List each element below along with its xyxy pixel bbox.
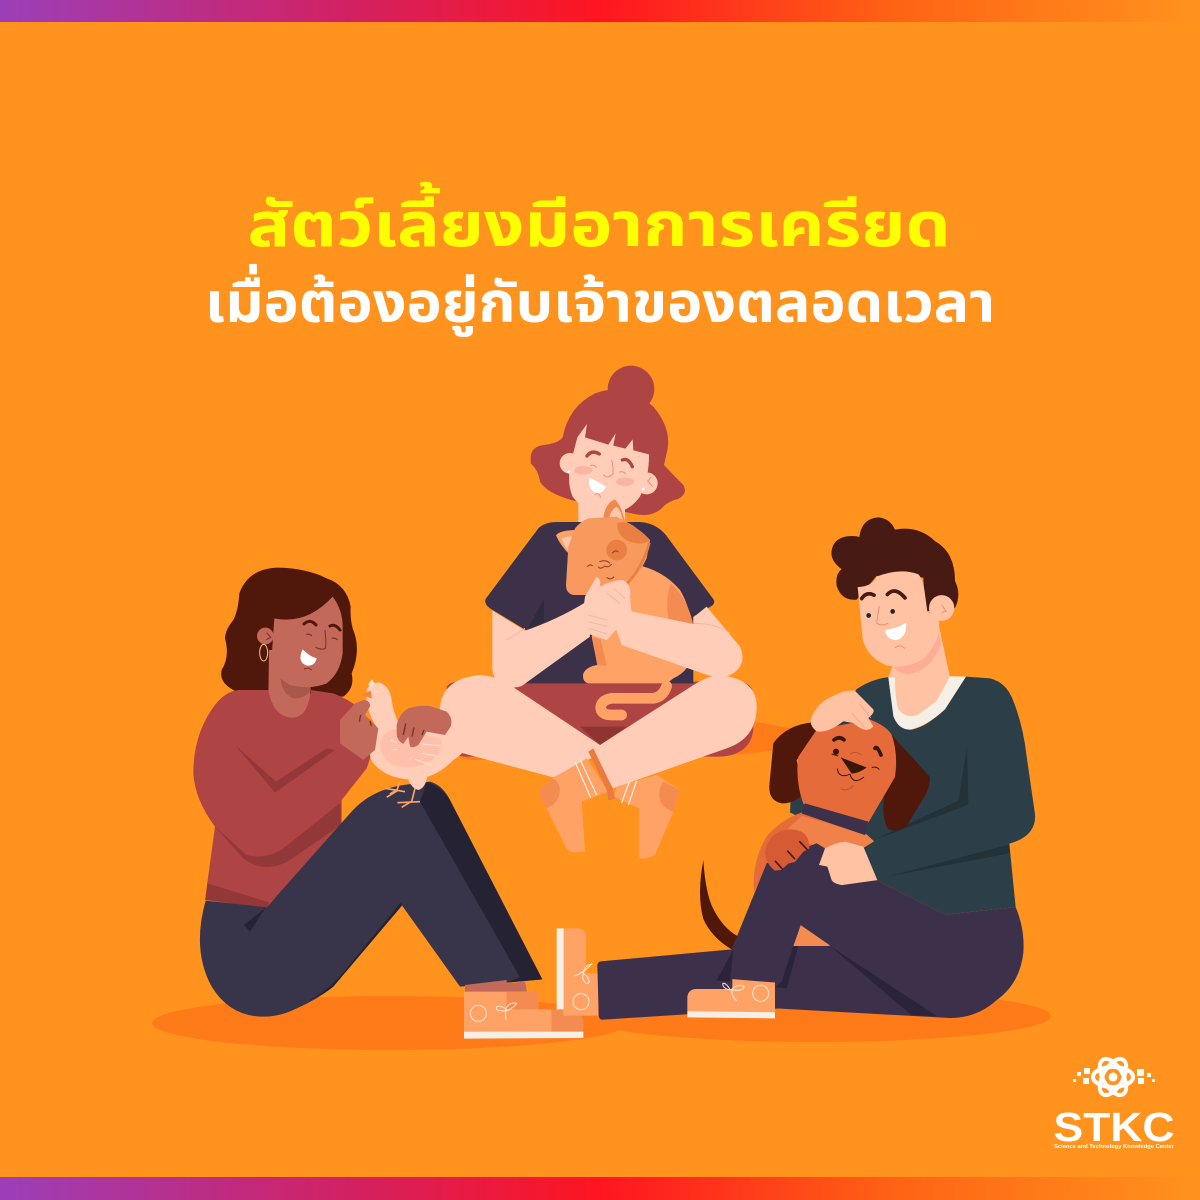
hair <box>831 517 958 611</box>
knuckle marks <box>852 704 871 728</box>
chicken <box>340 679 468 807</box>
pointing hand <box>340 700 378 760</box>
woman with chicken <box>193 568 598 1039</box>
hair <box>531 390 685 515</box>
STKC logo <box>1054 1055 1175 1150</box>
hand on knee <box>819 842 877 885</box>
neck <box>888 623 960 720</box>
feet <box>539 748 680 859</box>
paw claws <box>775 841 807 869</box>
neck <box>268 650 310 718</box>
neck shadow <box>281 678 311 698</box>
dog ears <box>769 722 930 831</box>
neck shadow <box>893 633 941 674</box>
shirt fold <box>527 598 544 629</box>
logo side squares <box>1073 1068 1155 1084</box>
shirt <box>485 522 714 683</box>
face details <box>567 452 653 498</box>
cat tail <box>601 686 667 715</box>
chicken wing <box>380 728 441 767</box>
logo wordmark: STKC <box>1054 1104 1174 1150</box>
logo tagline: Science and Technology Knowledge Center <box>1054 1144 1175 1150</box>
collar <box>888 676 966 730</box>
hair <box>221 568 357 697</box>
pants <box>597 843 1024 1020</box>
ground shadow: right <box>579 990 1051 1042</box>
cat body <box>583 563 693 683</box>
top gradient bar <box>0 0 1200 22</box>
darker shorts strip <box>580 727 627 745</box>
right arm and hands <box>584 577 742 676</box>
dog rear patch <box>794 925 830 945</box>
pants shading <box>717 946 937 1016</box>
collar of dog <box>802 803 868 835</box>
dog body <box>754 813 874 892</box>
face details <box>862 591 946 649</box>
ear <box>257 628 274 644</box>
bottom gradient bar <box>0 1177 1200 1200</box>
petting hand <box>397 706 451 747</box>
logo molecule mark <box>1093 1055 1133 1099</box>
front shoe <box>464 992 583 1039</box>
ground shadow: left <box>152 996 628 1050</box>
face details <box>266 621 340 670</box>
ankle <box>465 980 527 993</box>
sweater folds <box>873 747 1010 877</box>
dog head <box>797 720 896 823</box>
upright shoe <box>557 928 598 1016</box>
chicken feet <box>385 782 420 807</box>
sweater <box>193 690 372 903</box>
face <box>569 424 649 513</box>
cat head <box>556 499 650 595</box>
face <box>272 597 343 687</box>
man with dog <box>597 517 1035 1020</box>
finger lines <box>507 588 730 640</box>
chicken beak and comb <box>362 691 372 699</box>
sweater folds <box>206 745 341 908</box>
dog tail <box>700 860 738 949</box>
face <box>858 571 939 666</box>
hair bun <box>608 366 654 412</box>
pants shading <box>244 782 542 1002</box>
title line 2: เมื่อต้องอยู่กับเจ้าของตลอดเวลา <box>205 263 995 337</box>
chicken body <box>366 683 468 790</box>
title line 1: สัตว์เลี้ยงมีอาการเครียด <box>248 181 950 260</box>
crossed legs <box>440 675 757 788</box>
ground shadow: centre <box>440 720 790 760</box>
dog face <box>832 738 881 790</box>
pants <box>200 782 542 1017</box>
cat side shade <box>593 583 693 666</box>
shorts <box>447 682 753 757</box>
earring <box>260 644 268 661</box>
ears <box>560 453 658 494</box>
left arm <box>492 602 590 687</box>
woman with cat <box>440 366 757 859</box>
dog paw <box>765 829 809 871</box>
title <box>205 181 995 337</box>
shoe <box>687 979 775 1018</box>
ear <box>929 595 954 621</box>
finger marks <box>359 715 424 737</box>
neck <box>578 497 625 527</box>
sweater <box>790 677 1035 915</box>
dog rear <box>790 922 830 948</box>
hand on dog's head <box>811 690 874 732</box>
